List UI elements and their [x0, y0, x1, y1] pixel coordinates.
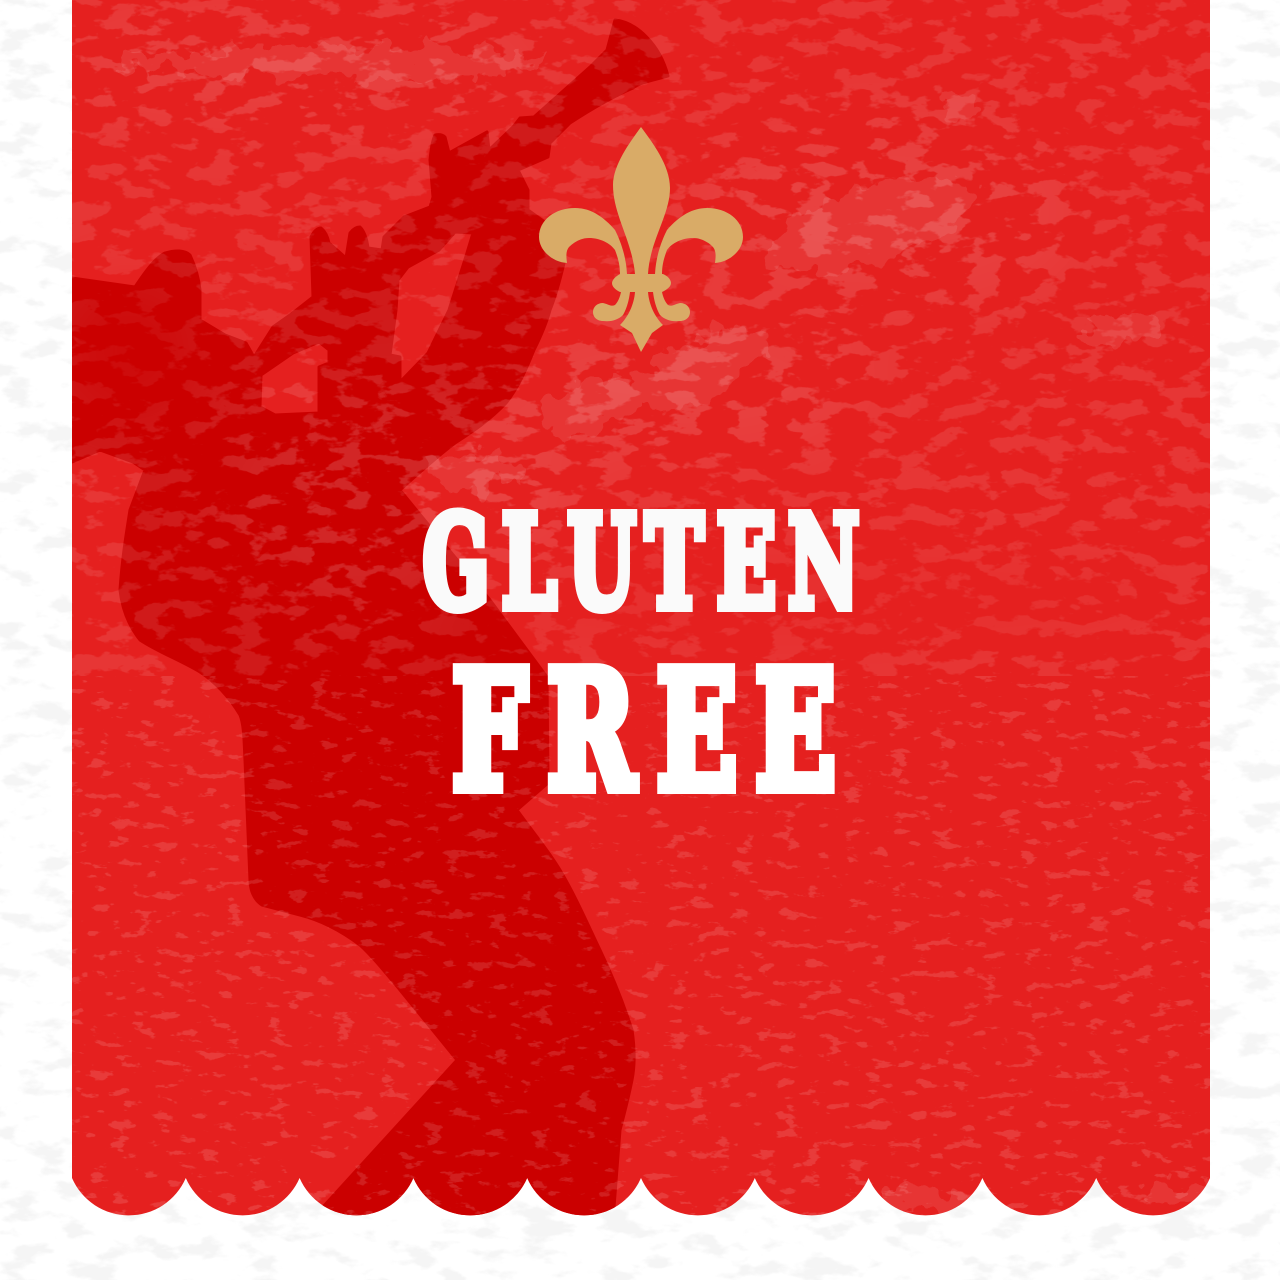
- heading: FREE: FREE: [452, 637, 836, 827]
- heading: GLUTEN: GLUTEN: [423, 488, 859, 637]
- texture: large pale blotches: [120, 35, 1220, 1210]
- texture: upper distressed overlay: [72, 0, 1210, 676]
- icon: gold fleur-de-lis: [539, 127, 743, 352]
- silhouette: trumpet player: [72, 20, 668, 1220]
- texture: lower distressed overlay: [72, 676, 1210, 1221]
